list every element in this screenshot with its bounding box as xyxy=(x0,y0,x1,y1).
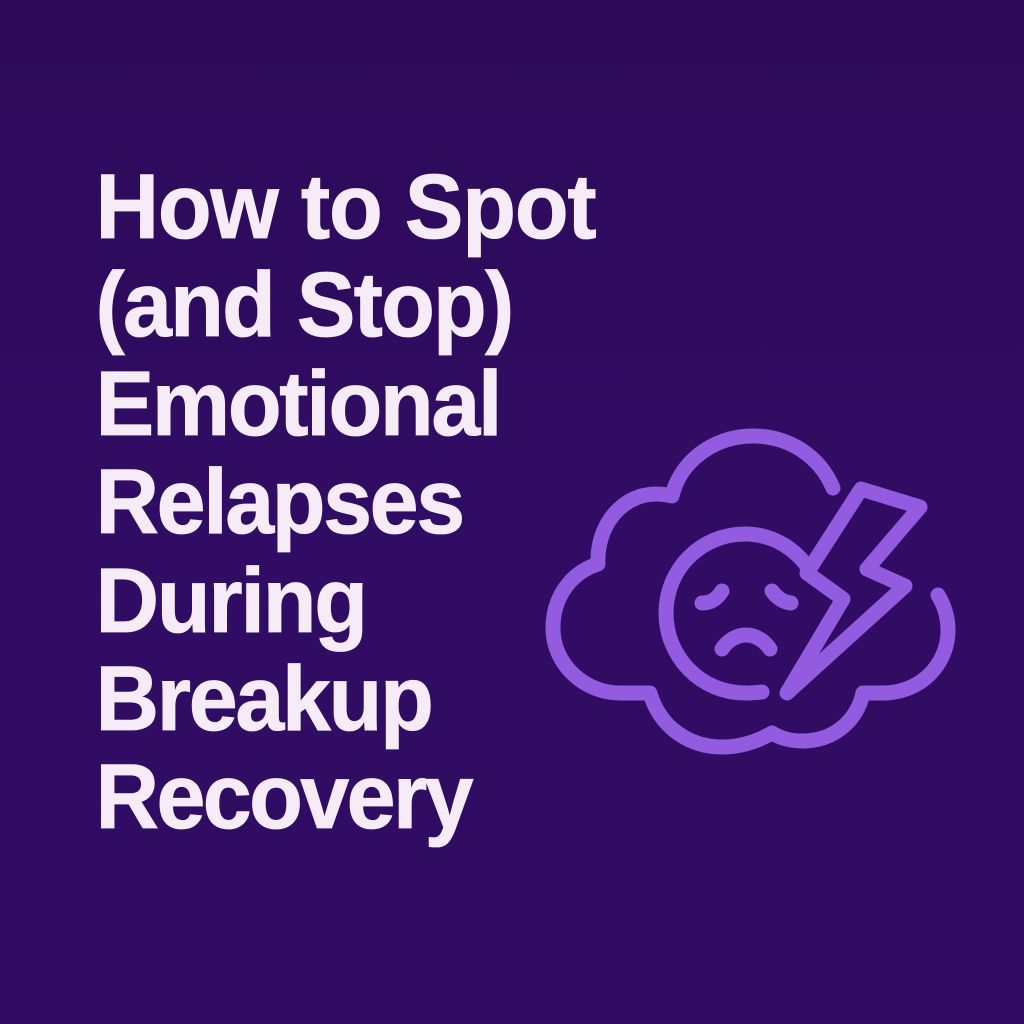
title xyxy=(96,155,596,848)
title: Breakup xyxy=(96,647,432,750)
lightning bolt xyxy=(787,489,920,693)
title: (and Stop) xyxy=(96,253,513,356)
title: Emotional xyxy=(96,352,500,455)
right eye xyxy=(772,591,791,603)
title: Recovery xyxy=(96,745,471,848)
left eye xyxy=(702,591,722,603)
sad face circle xyxy=(666,534,807,693)
cloud outline xyxy=(553,436,948,747)
title: During xyxy=(96,549,366,652)
title: How to Spot xyxy=(96,155,596,258)
title: Relapses xyxy=(96,450,463,553)
mouth xyxy=(722,635,770,649)
